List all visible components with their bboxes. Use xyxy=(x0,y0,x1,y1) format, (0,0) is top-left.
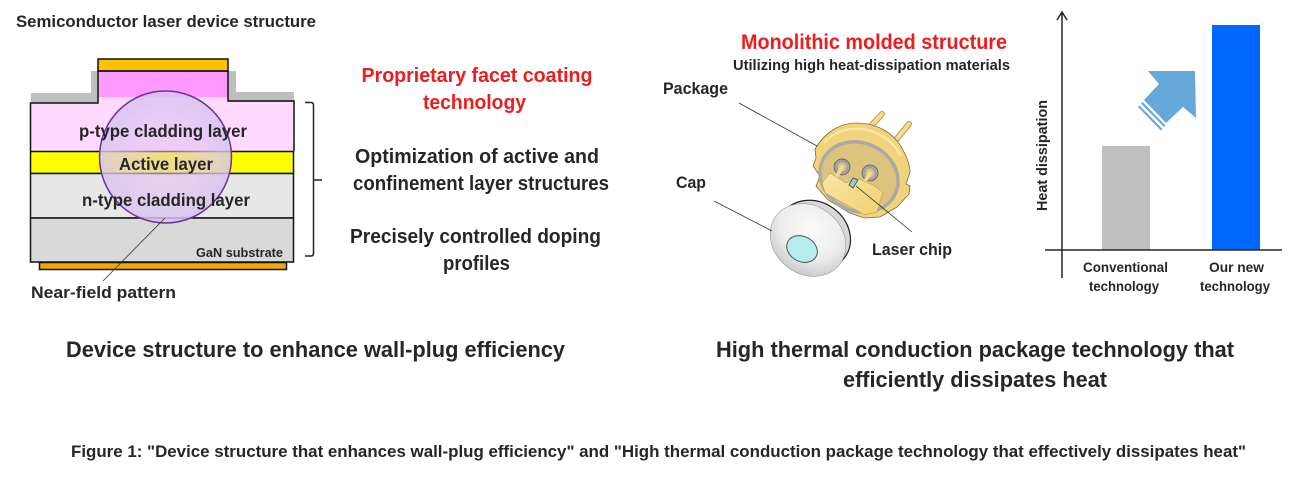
heading: semiconductor laser device structure: Semiconductor laser device structure xyxy=(16,12,316,31)
text block: left column technologies xyxy=(350,65,609,275)
bracket xyxy=(305,102,322,256)
label: package: Package xyxy=(663,79,728,98)
heading: monolithic molded structure: Monolithic molded structure xyxy=(741,31,1007,54)
diagram: laser device layers xyxy=(30,59,294,302)
cap body xyxy=(756,189,860,291)
flange highlight xyxy=(824,129,901,156)
ridge outline xyxy=(30,71,294,151)
pink ridge xyxy=(99,72,228,97)
optimization text: confinement layer structures xyxy=(353,173,609,195)
label: near-field pattern: Near-field pattern xyxy=(31,283,176,302)
label: active layer: Active layer xyxy=(119,154,213,174)
package pins xyxy=(871,114,909,141)
cap rear rim xyxy=(764,186,864,284)
y axis label: Heat dissipation xyxy=(1034,100,1051,211)
x label: our new technology: technology xyxy=(1200,278,1270,294)
pointer line xyxy=(103,218,165,281)
illustration: laser package xyxy=(808,114,910,225)
pin sockets xyxy=(834,159,850,175)
x label: our new technology: Our new xyxy=(1209,259,1264,275)
doping text: Precisely controlled doping xyxy=(350,226,601,248)
subheading: materials: Utilizing high heat-dissipation materials xyxy=(733,57,1010,74)
package body xyxy=(813,123,910,218)
conventional bar xyxy=(1102,146,1150,250)
optimization text: Optimization of active and xyxy=(355,146,599,168)
doping text: profiles xyxy=(443,253,510,275)
active layer band xyxy=(30,152,294,174)
label: GaN substrate: GaN substrate xyxy=(196,245,283,260)
figure caption: Figure 1: "Device structure that enhances wall-plug efficiency" and "High thermal conduction package technology that effectively dissipates heat" xyxy=(71,443,1246,461)
caption: thermal conduction: High thermal conduction package technology that xyxy=(716,337,1234,362)
bottom electrode xyxy=(40,262,286,270)
heat sink block xyxy=(822,173,883,215)
top electrode xyxy=(98,59,228,71)
x axis xyxy=(1045,249,1282,251)
leader lines xyxy=(714,103,912,232)
grey ring xyxy=(808,129,910,225)
GaN substrate band xyxy=(30,218,294,262)
new technology bar xyxy=(1212,25,1260,250)
label: p-type cladding layer: p-type cladding layer xyxy=(79,121,247,141)
label: n-type cladding layer: n-type cladding layer xyxy=(82,190,250,210)
n-type cladding layer band xyxy=(30,174,294,218)
increase arrow xyxy=(1138,71,1196,130)
label: cap: Cap xyxy=(676,173,706,192)
caption: thermal conduction: efficiently dissipates heat xyxy=(843,367,1107,392)
x label: conventional technology: technology xyxy=(1089,278,1159,294)
grey passivation layer xyxy=(31,71,294,103)
illustration: cap xyxy=(756,186,864,291)
inner pins xyxy=(837,167,870,183)
x label: conventional technology: Conventional xyxy=(1083,259,1168,275)
red heading: proprietary facet coating technology: technology xyxy=(423,92,527,114)
red heading: proprietary facet coating technology: Proprietary facet coating xyxy=(362,65,592,87)
y axis xyxy=(1057,12,1067,278)
laser chip xyxy=(849,178,858,188)
label: laser chip: Laser chip xyxy=(872,240,952,259)
near-field pattern circle xyxy=(100,91,232,223)
cap window xyxy=(782,230,822,268)
caption: device structure: Device structure to enhance wall-plug efficiency xyxy=(66,337,565,362)
bar chart: heat dissipation xyxy=(1034,12,1282,294)
p-type cladding layer xyxy=(30,97,294,151)
